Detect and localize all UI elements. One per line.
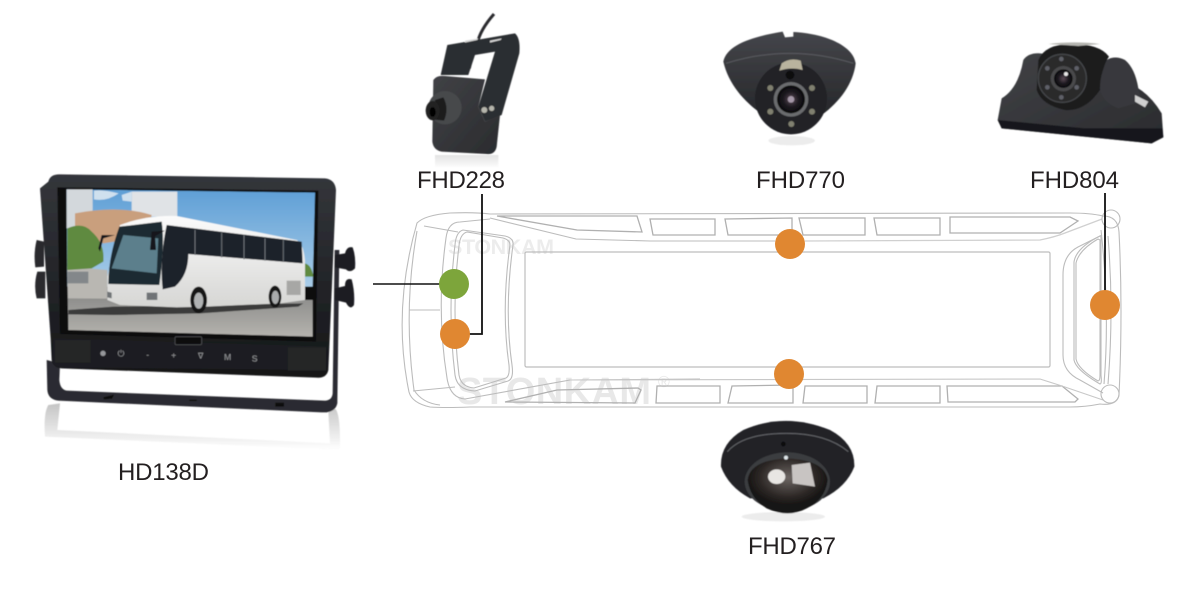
- lens ring: [1038, 54, 1086, 102]
- camera FHD767: [721, 421, 854, 521]
- bus body: [107, 216, 305, 307]
- bus top-view outline: [402, 210, 1121, 413]
- button icons: +: [171, 350, 176, 360]
- monitor housing: [40, 174, 336, 378]
- connector: monitor to green marker: [373, 283, 440, 285]
- camera head: [1037, 44, 1109, 110]
- bus wheels: [190, 287, 207, 313]
- base flange: [998, 120, 1163, 143]
- bus rear door and window: [1063, 235, 1103, 393]
- label: FHD770: FHD770: [756, 167, 845, 194]
- camera cable: [469, 14, 494, 68]
- monitor HD138D: [35, 174, 355, 450]
- bus mirror: [98, 231, 165, 252]
- bracket slots: [465, 38, 502, 43]
- bracket screws: [481, 107, 487, 113]
- monitor left knobs: [35, 240, 45, 298]
- watermark: small STONKAM: STONKAM: [448, 235, 554, 259]
- button icons: S: [252, 353, 258, 363]
- dome shell: [723, 32, 856, 115]
- bus side windows: [162, 225, 303, 289]
- monitor screen: [67, 189, 315, 337]
- watermark: registered mark: ®: [658, 374, 670, 391]
- marker: top side camera: [775, 229, 805, 259]
- screen trees: [67, 226, 104, 270]
- label: FHD804: FHD804: [1030, 167, 1119, 194]
- monitor button strip: [53, 338, 327, 370]
- base screw hole: [1135, 95, 1148, 107]
- bus headlights: [107, 292, 157, 300]
- monitor right knobs: [335, 247, 355, 307]
- bus rear corners: [1102, 210, 1120, 228]
- monitor centre clip: [175, 337, 202, 345]
- LEDs: [1045, 57, 1079, 100]
- button icons: ⏻: [118, 349, 125, 359]
- right shoulder: [1100, 58, 1142, 108]
- screen sky: [67, 189, 315, 287]
- inner ring: [745, 452, 830, 511]
- bus lower body lines: [570, 379, 1103, 400]
- bus top windows: [497, 216, 1078, 235]
- camera reflection: [435, 155, 498, 168]
- speaker grille right: [288, 347, 326, 371]
- ring highlight: [727, 433, 848, 452]
- dome ring: [721, 421, 854, 498]
- bus windscreen: [108, 222, 163, 285]
- monitor reflection: [45, 403, 340, 450]
- ring screw: [781, 442, 786, 446]
- bracket slots: [103, 395, 284, 407]
- marker: bottom side camera: [774, 359, 804, 389]
- camera FHD770: [723, 32, 856, 145]
- marker: front camera: [440, 319, 470, 349]
- connector: FHD228: [468, 194, 482, 334]
- button icons: M: [224, 352, 231, 362]
- screen buildings: [67, 189, 93, 228]
- marker: monitor position: [439, 269, 469, 299]
- bus bottom windows: [505, 385, 1078, 403]
- sensor: [786, 71, 794, 79]
- head highlight: [1048, 42, 1100, 46]
- light window: [779, 59, 803, 71]
- LEDs: [767, 85, 815, 127]
- screen road: [68, 298, 313, 337]
- bus rear vent: [287, 281, 301, 295]
- camera lens ring: [428, 91, 462, 124]
- lens dome: [748, 458, 828, 513]
- dome reflection: [768, 136, 815, 145]
- button icons: [100, 349, 258, 363]
- camera body: [432, 76, 500, 154]
- button icons: ∇: [197, 352, 204, 361]
- camera lens barrel: [433, 97, 447, 121]
- camera lens: [426, 101, 440, 120]
- camera housing: [755, 62, 827, 134]
- label: FHD767: FHD767: [748, 533, 836, 560]
- screen background pavement: [67, 267, 107, 313]
- marker: rear camera: [1090, 290, 1120, 320]
- camera FHD228: [426, 14, 520, 168]
- monitor bracket: [47, 250, 339, 412]
- monitor hood inner: [57, 187, 318, 342]
- bus roof panel: [525, 252, 1050, 367]
- camera lens: [1051, 66, 1076, 91]
- camera lens: [774, 82, 808, 117]
- camera reflection: [742, 512, 825, 521]
- camera base: [998, 53, 1163, 143]
- camera bracket: [441, 33, 520, 122]
- watermark: large STONKAM: STONKAM: [457, 371, 651, 413]
- speaker grille left: [55, 340, 91, 363]
- dome rim line: [726, 53, 853, 63]
- dome highlights: [768, 469, 785, 484]
- bus front windscreen lines: [409, 231, 440, 405]
- label: HD138D: HD138D: [118, 459, 209, 486]
- button icons: -: [146, 349, 149, 359]
- label: FHD228: FHD228: [417, 167, 505, 194]
- bus outer shell: [402, 213, 1121, 408]
- connector: FHD804: [1104, 193, 1106, 292]
- camera FHD804: [998, 42, 1163, 143]
